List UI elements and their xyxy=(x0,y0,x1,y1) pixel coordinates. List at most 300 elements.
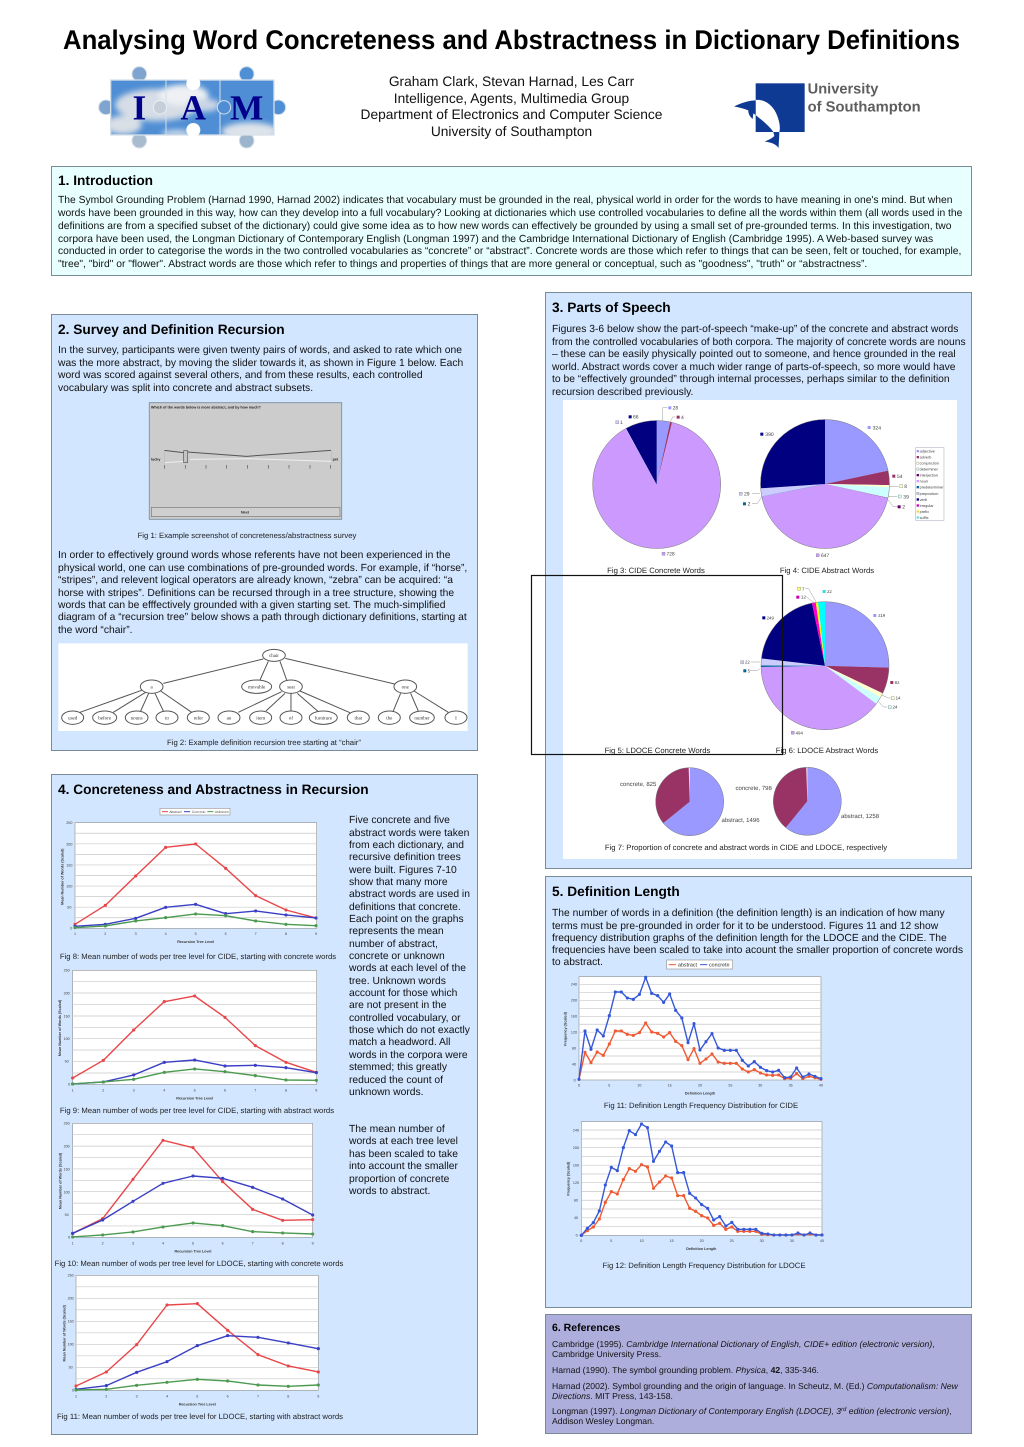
chart: Fig 11 line chart LDOCE abstract: 50 xyxy=(69,1366,73,1370)
text: references list: Cambridge (1995). Cambridge International Dictionary of English, CIDE+ edition (electronic version), xyxy=(552,1339,935,1349)
text: introduction body: definitions are from a specified subset of the dictionary) could give some idea as to how new words can effectively be grounded by using a small set of pre-grounded terms. In this investigation, two xyxy=(58,221,952,232)
text: references list: edition (electronic version) xyxy=(846,1406,949,1416)
text: recursion description: horse with stripes”. Definitions can be recursed through in a tree structure, showing the xyxy=(58,588,454,599)
diagram: recursion tree: used xyxy=(68,715,77,721)
chart: Fig 7 pie CIDE proportion: concrete, 825 xyxy=(620,781,657,788)
heading: Survey and Definition Recursion: 2. Survey and Definition Recursion xyxy=(58,322,285,337)
chart: Fig 9 line chart: Recursion Tree Level xyxy=(176,1096,213,1100)
chart: Fig 11 definition length CIDE: 160 xyxy=(571,1015,577,1019)
chart: Fig 6 pie LDOCE abstract: 249 xyxy=(767,615,774,620)
legend: parts of speech: predeterminer xyxy=(920,486,944,490)
text: introduction body: "tree", "bird" or "flower". Abstract words are those which refer to things and properties of things that are more general or conceptual, such as "goodness", "truth" or “abstractness”. xyxy=(58,259,867,270)
chart: Fig 6 pie LDOCE abstract: 7 xyxy=(802,586,804,591)
chart: Fig 10 line chart: 150 xyxy=(64,1168,70,1172)
chart: Fig 11 line chart LDOCE abstract xyxy=(62,1274,319,1406)
text: recursion explanation: abstract words are used in xyxy=(349,889,470,900)
chart: Fig 6 pie LDOCE abstract: 12 xyxy=(801,595,806,600)
chart: Fig 11 definition length CIDE: 0 xyxy=(578,1084,580,1088)
text: recursion explanation: reduced the count of xyxy=(349,1075,443,1086)
panel: 2. Survey and Definition Recursion xyxy=(52,314,478,750)
text: recursion explanation: number of abstract, xyxy=(349,939,438,950)
chart: Fig 11 definition length CIDE: 80 xyxy=(572,1046,576,1050)
panel: 1. Introduction xyxy=(52,166,972,276)
chart: Fig 8 line chart xyxy=(61,808,317,944)
chart: Fig 10 line chart: 5 xyxy=(192,1241,194,1245)
chart: Fig 11 definition length CIDE: 5 xyxy=(608,1084,610,1088)
chart: Fig 8 line chart: Abstract xyxy=(169,810,182,814)
chart: Fig 6 pie LDOCE abstract: 83 xyxy=(895,680,899,685)
caption: Fig 4: Fig 4: CIDE Abstract Words xyxy=(780,566,874,575)
figure: survey screenshot: Next xyxy=(241,511,249,515)
diagram: recursion tree: one xyxy=(402,684,409,690)
chart: Fig 4 pie CIDE abstract: 8 xyxy=(904,484,907,489)
chart: Fig 12 definition length LDOCE: 80 xyxy=(574,1199,578,1203)
text: survey description: was the more abstract, by moving the slider towards it, as shown in Figure 1 below. Each xyxy=(57,358,464,369)
chart: Fig 3 pie CIDE concrete xyxy=(593,405,721,557)
text: references list: rd xyxy=(841,1406,847,1413)
text: survey description: In the survey, participants were given twenty pairs of words, and asked to rate which one xyxy=(58,345,462,356)
text: introduction body: The Symbol Grounding Problem (Harnad 1990, Harnad 2002) indicates that vocabulary must be grounded in the real, physical world in order for the words to have meaning in one's mind. But when xyxy=(58,195,953,206)
chart: Fig 10 line chart: 7 xyxy=(252,1241,254,1245)
chart: Fig 12 definition length LDOCE: Frequency (Scaled) xyxy=(566,1162,570,1196)
chart: Fig 10 line chart xyxy=(58,1122,314,1253)
chart: Fig 11 definition length CIDE: 10 xyxy=(637,1084,641,1088)
diagram: recursion tree: item xyxy=(256,715,265,721)
chart: Fig 8 line chart: 2 xyxy=(104,932,106,936)
chart: Fig 10 line chart: 50 xyxy=(65,1213,69,1217)
chart: Fig 11 definition length CIDE: concrete xyxy=(709,962,729,968)
caption: Fig 12: Fig 12: Definition Length Frequency Distribution for LDOCE xyxy=(603,1261,805,1270)
chart: Fig 3 pie CIDE concrete: 1 xyxy=(620,420,623,425)
chart: Fig 8 line chart: 7 xyxy=(255,932,257,936)
text: recursion description: words that can be efffectively grounded with a given starting set. The much-simplified xyxy=(57,600,446,611)
logo: IAM puzzle xyxy=(99,67,286,148)
chart: Fig 4 pie CIDE abstract: 390 xyxy=(765,432,774,437)
text: definition length description: frequencies have been scaled to take into acount the smaller proportion of concrete words xyxy=(552,945,963,956)
logo: University of Southampton xyxy=(734,81,921,148)
text: recursion explanation: abstract words were taken xyxy=(349,828,470,839)
text: recursion explanation: from each dictionary, and xyxy=(349,840,464,851)
chart: Fig 11 line chart LDOCE abstract: 150 xyxy=(68,1320,74,1324)
text: references list xyxy=(552,1339,959,1426)
chart: Fig 11 line chart LDOCE abstract: 8 xyxy=(287,1394,289,1398)
text: recursion description: “stripes”, and relevent logical operators are already known, “zebra” can be acquired: “a xyxy=(58,575,453,586)
text: definition length description: The number of words in a definition (the definition length) is an indication of how many xyxy=(552,908,946,919)
chart: Fig 9 line chart: 7 xyxy=(254,1089,256,1093)
chart: Fig 11 definition length CIDE: abstract xyxy=(678,962,697,968)
caption: Fig 5: Fig 5: LDOCE Concrete Words xyxy=(605,746,711,755)
text: definition length description xyxy=(552,908,963,968)
chart: Fig 7 pie LDOCE proportion: concrete, 798 xyxy=(736,785,773,792)
chart: Fig 9 line chart: 50 xyxy=(65,1060,69,1064)
chart: Fig 11 line chart LDOCE abstract: 200 xyxy=(68,1297,74,1301)
text: definition length description: terms must be pre-grounded in order for it to be understood. Figures 11 and 12 show xyxy=(552,921,939,932)
text: parts of speech description: from the controlled vocabularies of both corpora. The majority of concrete words are nouns xyxy=(552,337,966,348)
diagram: recursion tree: number xyxy=(414,715,430,721)
text: recursion explanation: show that many more xyxy=(349,877,448,888)
text: introduction body: words have been grounded in this way, how can they develop into a full vocabulary? Looking at dictionaries which use controlled vocabularies to define all the words within them (all words used in the xyxy=(57,208,963,219)
text: references list: Longman (1997). Longman Dictionary of Contemporary English (LDOCE), 3 xyxy=(552,1406,841,1416)
text: recursion explanation: words in the corpora were xyxy=(348,1050,468,1061)
chart: Fig 8 line chart: 5 xyxy=(195,932,197,936)
text: recursion explanation: words at each level of the xyxy=(348,963,466,974)
chart: Fig 9 line chart: 1 xyxy=(72,1089,74,1093)
chart: Fig 6 pie LDOCE abstract: 14 xyxy=(896,696,900,701)
chart: Fig 9 line chart: 6 xyxy=(224,1089,226,1093)
chart: Fig 11 definition length CIDE: Frequency (Scaled) xyxy=(564,1012,568,1046)
diagram: recursion tree: the xyxy=(386,715,392,721)
chart: Fig 10 line chart: 3 xyxy=(132,1241,134,1245)
chart: Fig 8 line chart: Mean Number of Words (Scaled) xyxy=(61,848,65,905)
chart: Fig 6 pie LDOCE abstract: 494 xyxy=(796,730,803,735)
diagram: recursion tree xyxy=(58,643,468,731)
diagram: recursion tree: nouns xyxy=(131,715,143,721)
chart: Fig 11 line chart LDOCE abstract: 250 xyxy=(68,1274,74,1278)
chart: Fig 7 pie CIDE proportion: abstract, 1496 xyxy=(722,817,760,824)
text: recursion description: diagram of a “recursion tree” below shows a path through dictionary definitions, starting at xyxy=(58,612,467,623)
text: recursion explanation: Each point on the graphs xyxy=(349,914,464,925)
chart: Fig 8 line chart: 150 xyxy=(66,864,72,868)
chart: Fig 11 definition length CIDE: 240 xyxy=(571,983,577,987)
chart: Fig 8 line chart: Unknown xyxy=(215,810,229,814)
caption: Fig 1: Fig 1: Example screenshot of concreteness/abstractness survey xyxy=(138,531,357,540)
chart: Fig 4 pie CIDE abstract: 29 xyxy=(744,491,750,497)
chart: Fig 8 line chart: 250 xyxy=(66,821,72,825)
chart: Fig 11 definition length CIDE: 15 xyxy=(668,1084,672,1088)
chart: Fig 10 line chart: Recursion Tree Level xyxy=(175,1249,211,1253)
chart: Fig 12 definition length LDOCE: 20 xyxy=(700,1239,704,1243)
chart: Fig 6 pie LDOCE abstract: 5 xyxy=(748,668,750,673)
diagram: recursion tree: I xyxy=(455,715,457,721)
chart: Fig 12 definition length LDOCE: 40 xyxy=(820,1239,824,1243)
text: recursion explanation: represents the mean xyxy=(349,926,444,937)
chart: Fig 8 line chart: 9 xyxy=(315,932,317,936)
chart: Fig 12 definition length LDOCE: 200 xyxy=(573,1146,579,1150)
diagram: recursion tree: movable xyxy=(248,684,265,690)
chart: Fig 3 pie CIDE concrete: 66 xyxy=(633,414,639,420)
authors xyxy=(361,74,663,139)
chart: Fig 12 definition length LDOCE: 10 xyxy=(640,1239,644,1243)
text: recursion explanation: were built. Figures 7-10 xyxy=(348,865,457,876)
chart: Fig 11 definition length CIDE: 200 xyxy=(571,999,577,1003)
caption: Fig 6: Fig 6: LDOCE Abstract Words xyxy=(776,746,878,755)
chart: Fig 12 definition length LDOCE: 0 xyxy=(580,1239,582,1243)
heading: Concreteness and Abstractness in Recursion: 4. Concreteness and Abstractness in Recursion xyxy=(58,782,369,797)
chart: Fig 6 pie LDOCE abstract: 319 xyxy=(878,613,885,618)
chart: Fig 12 definition length LDOCE: 35 xyxy=(790,1239,794,1243)
chart: Fig 11 definition length CIDE: 0 xyxy=(574,1078,576,1082)
heading: References: 6. References xyxy=(552,1322,620,1334)
chart: Fig 11 definition length CIDE: 40 xyxy=(819,1084,823,1088)
chart: Fig 9 line chart: 8 xyxy=(285,1089,287,1093)
chart: Fig 11 definition length CIDE: Definition Length xyxy=(685,1091,715,1095)
text: recursion explanation: concrete or unknown xyxy=(349,951,445,962)
chart: Fig 10 line chart: 100 xyxy=(64,1190,70,1194)
chart: Fig 4 pie CIDE abstract: 324 xyxy=(873,425,881,431)
text: parts of speech description: world. Abstract words cover a much wider range of parts-of-speech, so more would have xyxy=(551,362,956,373)
chart: Fig 12 definition length LDOCE: 25 xyxy=(730,1239,734,1243)
chart: Fig 3 pie CIDE concrete: 728 xyxy=(666,551,675,557)
text: scaling explanation: has been scaled to take xyxy=(349,1149,458,1160)
text: definition length description: to abstract. xyxy=(552,957,603,968)
panel: 5. Definition Length xyxy=(546,876,972,1308)
chart: Fig 9 line chart: 5 xyxy=(194,1089,196,1093)
text: introduction body: corpora have been used, the Longman Dictionary of Contemporary English (Longman 1997) and the Cambridge International Dictionary of English (Cambridge 1995). A Web-based survey was xyxy=(58,234,933,245)
caption: Fig 3: Fig 3: CIDE Concrete Words xyxy=(607,566,705,575)
chart: Fig 9 line chart: 3 xyxy=(133,1089,135,1093)
chart: Fig 4 pie CIDE abstract xyxy=(739,420,909,558)
text: recursion description: physical world, one can use combinations of pre-grounded words. For example, if “horse”, xyxy=(58,563,467,574)
figure: survey screenshot: lucky xyxy=(151,457,161,461)
text: parts of speech description xyxy=(551,324,966,398)
legend: parts of speech: conjunction xyxy=(920,462,939,466)
title: Analysing Word Concreteness and Abstractness in Dictionary Definitions xyxy=(63,25,960,55)
logo: IAM puzzle: A xyxy=(181,88,206,127)
figure: survey screenshot: Which of the words below is more abstract, and by how much? xyxy=(151,405,261,409)
chart: Fig 6 pie LDOCE abstract xyxy=(741,586,900,735)
chart: Fig 8 line chart: 1 xyxy=(74,932,76,936)
logo: University of Southampton: of Southampton xyxy=(808,99,921,115)
chart: Fig 11 definition length CIDE: 35 xyxy=(789,1084,793,1088)
diagram: recursion tree: an xyxy=(227,715,232,721)
diagram: recursion tree: furniture xyxy=(315,715,332,721)
chart: Fig 12 definition length LDOCE: 5 xyxy=(610,1239,612,1243)
chart: Fig 9 line chart: Mean Number of Words (Scaled) xyxy=(58,1000,62,1056)
authors: Graham Clark, Stevan Harnad, Les Carr xyxy=(389,74,635,89)
chart: Fig 3 pie CIDE concrete: 4 xyxy=(681,415,684,420)
chart: Fig 8 line chart: 200 xyxy=(66,842,72,846)
black outline rectangle over figure 5 xyxy=(532,576,782,754)
text: survey description: word was scored against several others, and from these results, each controlled xyxy=(57,370,423,381)
text: recursion description: In order to effectively ground words whose referents have not been experienced in the xyxy=(58,550,451,561)
authors: Department of Electronics and Computer Science xyxy=(361,107,663,122)
text: introduction body xyxy=(57,195,963,270)
caption: Fig 9: Fig 9: Mean number of wods per tree level for CIDE, starting with abstract words xyxy=(60,1106,334,1115)
text: recursion explanation: account for those which xyxy=(349,988,458,999)
chart: Fig 11 line chart LDOCE abstract: 4 xyxy=(166,1394,168,1398)
text: recursion explanation: unknown words. xyxy=(349,1087,424,1098)
caption: Fig 8: Fig 8: Mean number of wods per tree level for CIDE, starting with concrete words xyxy=(60,952,336,961)
chart: Fig 10 line chart: 2 xyxy=(102,1241,104,1245)
diagram: recursion tree: chair xyxy=(269,653,279,658)
text: recursion explanation: controlled vocabulary, or xyxy=(349,1013,461,1024)
legend: parts of speech xyxy=(916,448,944,520)
chart: Fig 11 line chart LDOCE abstract: 2 xyxy=(105,1394,107,1398)
chart: Fig 8 line chart: Concrete xyxy=(192,810,206,814)
chart: Fig 10 line chart: 1 xyxy=(72,1241,74,1245)
chart: Fig 11 definition length CIDE: 120 xyxy=(571,1031,577,1035)
text: recursion explanation: Five concrete and five xyxy=(349,815,450,826)
chart: Fig 4 pie CIDE abstract: 2 xyxy=(748,501,750,507)
chart: Fig 10 line chart: 250 xyxy=(64,1122,70,1126)
text: recursion explanation: stemmed; this greatly xyxy=(349,1062,448,1073)
legend: parts of speech: prefix xyxy=(920,510,929,514)
chart: Fig 8 line chart: 3 xyxy=(135,932,137,936)
chart: Fig 12 definition length LDOCE xyxy=(566,1122,824,1251)
chart: Fig 10 line chart: 8 xyxy=(282,1241,284,1245)
chart: Fig 11 line chart LDOCE abstract: 6 xyxy=(227,1394,229,1398)
text: references list: , xyxy=(949,1406,952,1416)
chart: Fig 4 pie CIDE abstract: 2 xyxy=(902,504,905,510)
authors: University of Southampton xyxy=(431,124,592,139)
logo: IAM puzzle: I xyxy=(132,88,146,127)
text: scaling explanation xyxy=(348,1124,458,1197)
chart: Fig 3 pie CIDE concrete: 28 xyxy=(673,405,678,411)
chart: Fig 9 line chart: 200 xyxy=(64,992,70,996)
legend: parts of speech: noun xyxy=(920,480,928,484)
chart: Fig 8 line chart: 6 xyxy=(225,932,227,936)
text: scaling explanation: into account the smaller xyxy=(349,1161,458,1172)
chart: Fig 7 pie LDOCE proportion: abstract, 1258 xyxy=(841,813,880,820)
text: references list: Addison Wesley Longman. xyxy=(552,1416,654,1426)
caption: Fig 11 LDOCE recursion: Fig 11: Mean number of wods per tree level for LDOCE, starting with abstract words xyxy=(57,1412,343,1421)
text: recursion explanation: are not present in the xyxy=(349,1000,447,1011)
text: recursion explanation: match a headword. All xyxy=(349,1037,450,1048)
chart: Fig 8 line chart: 50 xyxy=(67,906,71,910)
figure: survey screenshot: pet xyxy=(333,457,338,461)
text: recursion explanation: tree. Unknown words xyxy=(349,976,446,987)
diagram: recursion tree: that xyxy=(355,715,362,721)
chart: Fig 11 line chart LDOCE abstract: 100 xyxy=(68,1343,74,1347)
chart: Fig 11 line chart LDOCE abstract: Recursion Tree Level xyxy=(179,1402,216,1406)
text: survey description: vocabulary was split into concrete and abstract subsets. xyxy=(58,383,313,394)
caption: Fig 7: Fig 7: Proportion of concrete and abstract words in CIDE and LDOCE, respectively xyxy=(605,843,887,852)
text: definition length description: frequency distribution graphs of the definition length for the LDOCE and the CIDE. The xyxy=(552,933,947,944)
chart: Fig 11 line chart LDOCE abstract: 5 xyxy=(196,1394,198,1398)
caption: Fig 2: Fig 2: Example definition recursion tree starting at “chair” xyxy=(167,738,361,747)
text: recursion explanation: those which do not exactly xyxy=(349,1025,471,1036)
chart: Fig 10 line chart: 200 xyxy=(64,1145,70,1149)
text: parts of speech description: recursion described previously. xyxy=(552,387,693,398)
chart: Fig 10 line chart: Mean Number of Words (Scaled) xyxy=(58,1153,62,1209)
logo: University of Southampton: University xyxy=(808,81,878,97)
figure: survey screenshot xyxy=(149,403,342,519)
chart: Fig 11 line chart LDOCE abstract: 3 xyxy=(136,1394,138,1398)
text: survey description xyxy=(57,345,464,394)
chart: Fig 8 line chart: Recursion Tree Level xyxy=(177,940,214,944)
panel: 6. References xyxy=(546,1314,972,1434)
chart: Fig 8 line chart: 0 xyxy=(70,927,72,931)
chart: Fig 12 definition length LDOCE: 40 xyxy=(574,1216,578,1220)
text: parts of speech description: – these can be easily physically pointed out to someone, and hence grounded in the real xyxy=(552,349,956,360)
chart: Fig 11 line chart LDOCE abstract: 9 xyxy=(317,1394,319,1398)
chart: Fig 8 line chart: 100 xyxy=(66,885,72,889)
text: recursion explanation: definitions that concrete. xyxy=(349,902,461,913)
chart: Fig 9 line chart: 150 xyxy=(64,1014,70,1018)
diagram: recursion tree: before xyxy=(98,715,111,721)
heading: Parts of Speech: 3. Parts of Speech xyxy=(552,300,671,315)
chart: Fig 12 definition length LDOCE: 30 xyxy=(760,1239,764,1243)
chart: Fig 12 definition length LDOCE: Definition Length xyxy=(686,1247,716,1251)
chart: Fig 11 definition length CIDE xyxy=(564,960,823,1095)
chart: Fig 12 definition length LDOCE: 240 xyxy=(573,1128,579,1132)
legend: parts of speech: verb xyxy=(920,498,927,502)
chart: Fig 11 line chart LDOCE abstract: Mean Number of Words (Scaled) xyxy=(62,1305,66,1362)
panel: 4. Concreteness and Abstractness in Recursion xyxy=(52,774,478,1434)
chart: Fig 4 pie CIDE abstract: 647 xyxy=(821,553,829,558)
legend: parts of speech: adverb xyxy=(920,456,931,460)
text: references list: Harnad (2002). Symbol grounding and the origin of language. In Scheutz, M. (Ed.) Computationalism: New xyxy=(552,1381,959,1391)
text: references list: Directions. MIT Press, 143-158. xyxy=(552,1391,673,1401)
legend: parts of speech: suffix xyxy=(920,516,929,520)
text: recursion explanation: recursive definition trees xyxy=(349,852,461,863)
chart: Fig 6 pie LDOCE abstract: 22 xyxy=(745,660,750,665)
heading: Introduction: 1. Introduction xyxy=(58,173,153,188)
text: parts of speech description: Figures 3-6 below show the part-of-speech “make-up” of the concrete and abstract words xyxy=(552,324,958,335)
chart: Fig 8 line chart: 4 xyxy=(165,932,167,936)
chart: Fig 12 definition length LDOCE: 120 xyxy=(573,1181,579,1185)
diagram: recursion tree: seat xyxy=(287,684,295,690)
text: references list: Harnad (1990). The symbol grounding problem. Physica, 42, 335-346. xyxy=(552,1365,819,1375)
chart: Fig 4 pie CIDE abstract: 39 xyxy=(903,494,909,500)
chart: Fig 11 line chart LDOCE abstract: 0 xyxy=(72,1389,74,1393)
chart: Fig 8 line chart: 8 xyxy=(285,932,287,936)
heading: Definition Length: 5. Definition Length xyxy=(552,884,680,899)
chart: Fig 7 pie LDOCE proportion xyxy=(736,767,880,835)
chart: Fig 11 definition length CIDE: 25 xyxy=(728,1084,732,1088)
panel: 3. Parts of Speech xyxy=(546,292,972,868)
chart: Fig 4 pie CIDE abstract: 54 xyxy=(897,474,903,479)
chart: Fig 11 definition length CIDE: 20 xyxy=(698,1084,702,1088)
text: recursion description xyxy=(57,550,467,636)
legend: parts of speech: adjective xyxy=(920,450,935,454)
text: scaling explanation: words at each tree level xyxy=(348,1136,458,1147)
authors: Intelligence, Agents, Multimedia Group xyxy=(394,91,630,106)
chart: Fig 9 line chart: 2 xyxy=(102,1089,104,1093)
chart: Fig 11 line chart LDOCE abstract: 7 xyxy=(257,1394,259,1398)
diagram: recursion tree: refer xyxy=(194,715,203,721)
chart: Fig 10 line chart: 4 xyxy=(162,1241,164,1245)
text: references list: Cambridge University Press. xyxy=(552,1349,661,1359)
caption: Fig 10: Fig 10: Mean number of wods per tree level for LDOCE, starting with concrete words xyxy=(55,1259,343,1268)
logo: IAM puzzle: M xyxy=(230,88,263,127)
diagram: recursion tree: a xyxy=(151,684,153,690)
chart: Fig 9 line chart: 0 xyxy=(68,1083,70,1087)
chart: Fig 12 definition length LDOCE: 0 xyxy=(576,1234,578,1238)
chart: Fig 9 line chart xyxy=(58,969,317,1100)
chart: Fig 12 definition length LDOCE: 15 xyxy=(670,1239,674,1243)
text: recursion description: the word “chair”. xyxy=(58,625,133,636)
chart: Fig 10 line chart: 9 xyxy=(312,1241,314,1245)
chart: Fig 10 line chart: 6 xyxy=(222,1241,224,1245)
chart: Fig 9 line chart: 4 xyxy=(163,1089,165,1093)
legend: parts of speech: irregular xyxy=(920,504,934,508)
chart: Fig 9 line chart: 250 xyxy=(64,969,70,973)
chart: Fig 11 line chart LDOCE abstract: 1 xyxy=(75,1394,77,1398)
chart: Fig 6 pie LDOCE abstract: 22 xyxy=(827,589,832,594)
text: parts of speech description: to be “effectively grounded” through internal processes, perhaps similar to the definition xyxy=(552,374,950,385)
chart: Fig 11 definition length CIDE: 40 xyxy=(572,1062,576,1066)
diagram: recursion tree: to xyxy=(165,715,169,721)
chart: Fig 9 line chart: 9 xyxy=(315,1089,317,1093)
legend: parts of speech: interjection xyxy=(920,474,938,478)
chart: Fig 6 pie LDOCE abstract: 24 xyxy=(893,705,897,710)
text: scaling explanation: proportion of concrete xyxy=(349,1174,450,1185)
chart: Fig 11 definition length CIDE: 30 xyxy=(758,1084,762,1088)
chart: Fig 7 pie CIDE proportion xyxy=(620,768,760,836)
text: introduction body: conducted in order to categorise the words in the two controlled vocabularies as “concrete” or “abstract”. Concrete words are those which refer to things that can be seen, felt or touched, for example, xyxy=(58,246,961,257)
text: scaling explanation: words to abstract. xyxy=(348,1186,430,1197)
chart: Fig 9 line chart: 100 xyxy=(64,1037,70,1041)
text: recursion explanation xyxy=(348,815,471,1098)
text: scaling explanation: The mean number of xyxy=(349,1124,445,1135)
legend: parts of speech: preposition xyxy=(920,492,938,496)
diagram: recursion tree: of xyxy=(289,715,293,721)
chart: Fig 10 line chart: 0 xyxy=(68,1236,70,1240)
chart: Fig 12 definition length LDOCE: 160 xyxy=(573,1163,579,1167)
caption: Fig 11 definition length: Fig 11: Definition Length Frequency Distribution for CIDE xyxy=(604,1101,798,1110)
legend: parts of speech: determiner xyxy=(920,468,938,472)
